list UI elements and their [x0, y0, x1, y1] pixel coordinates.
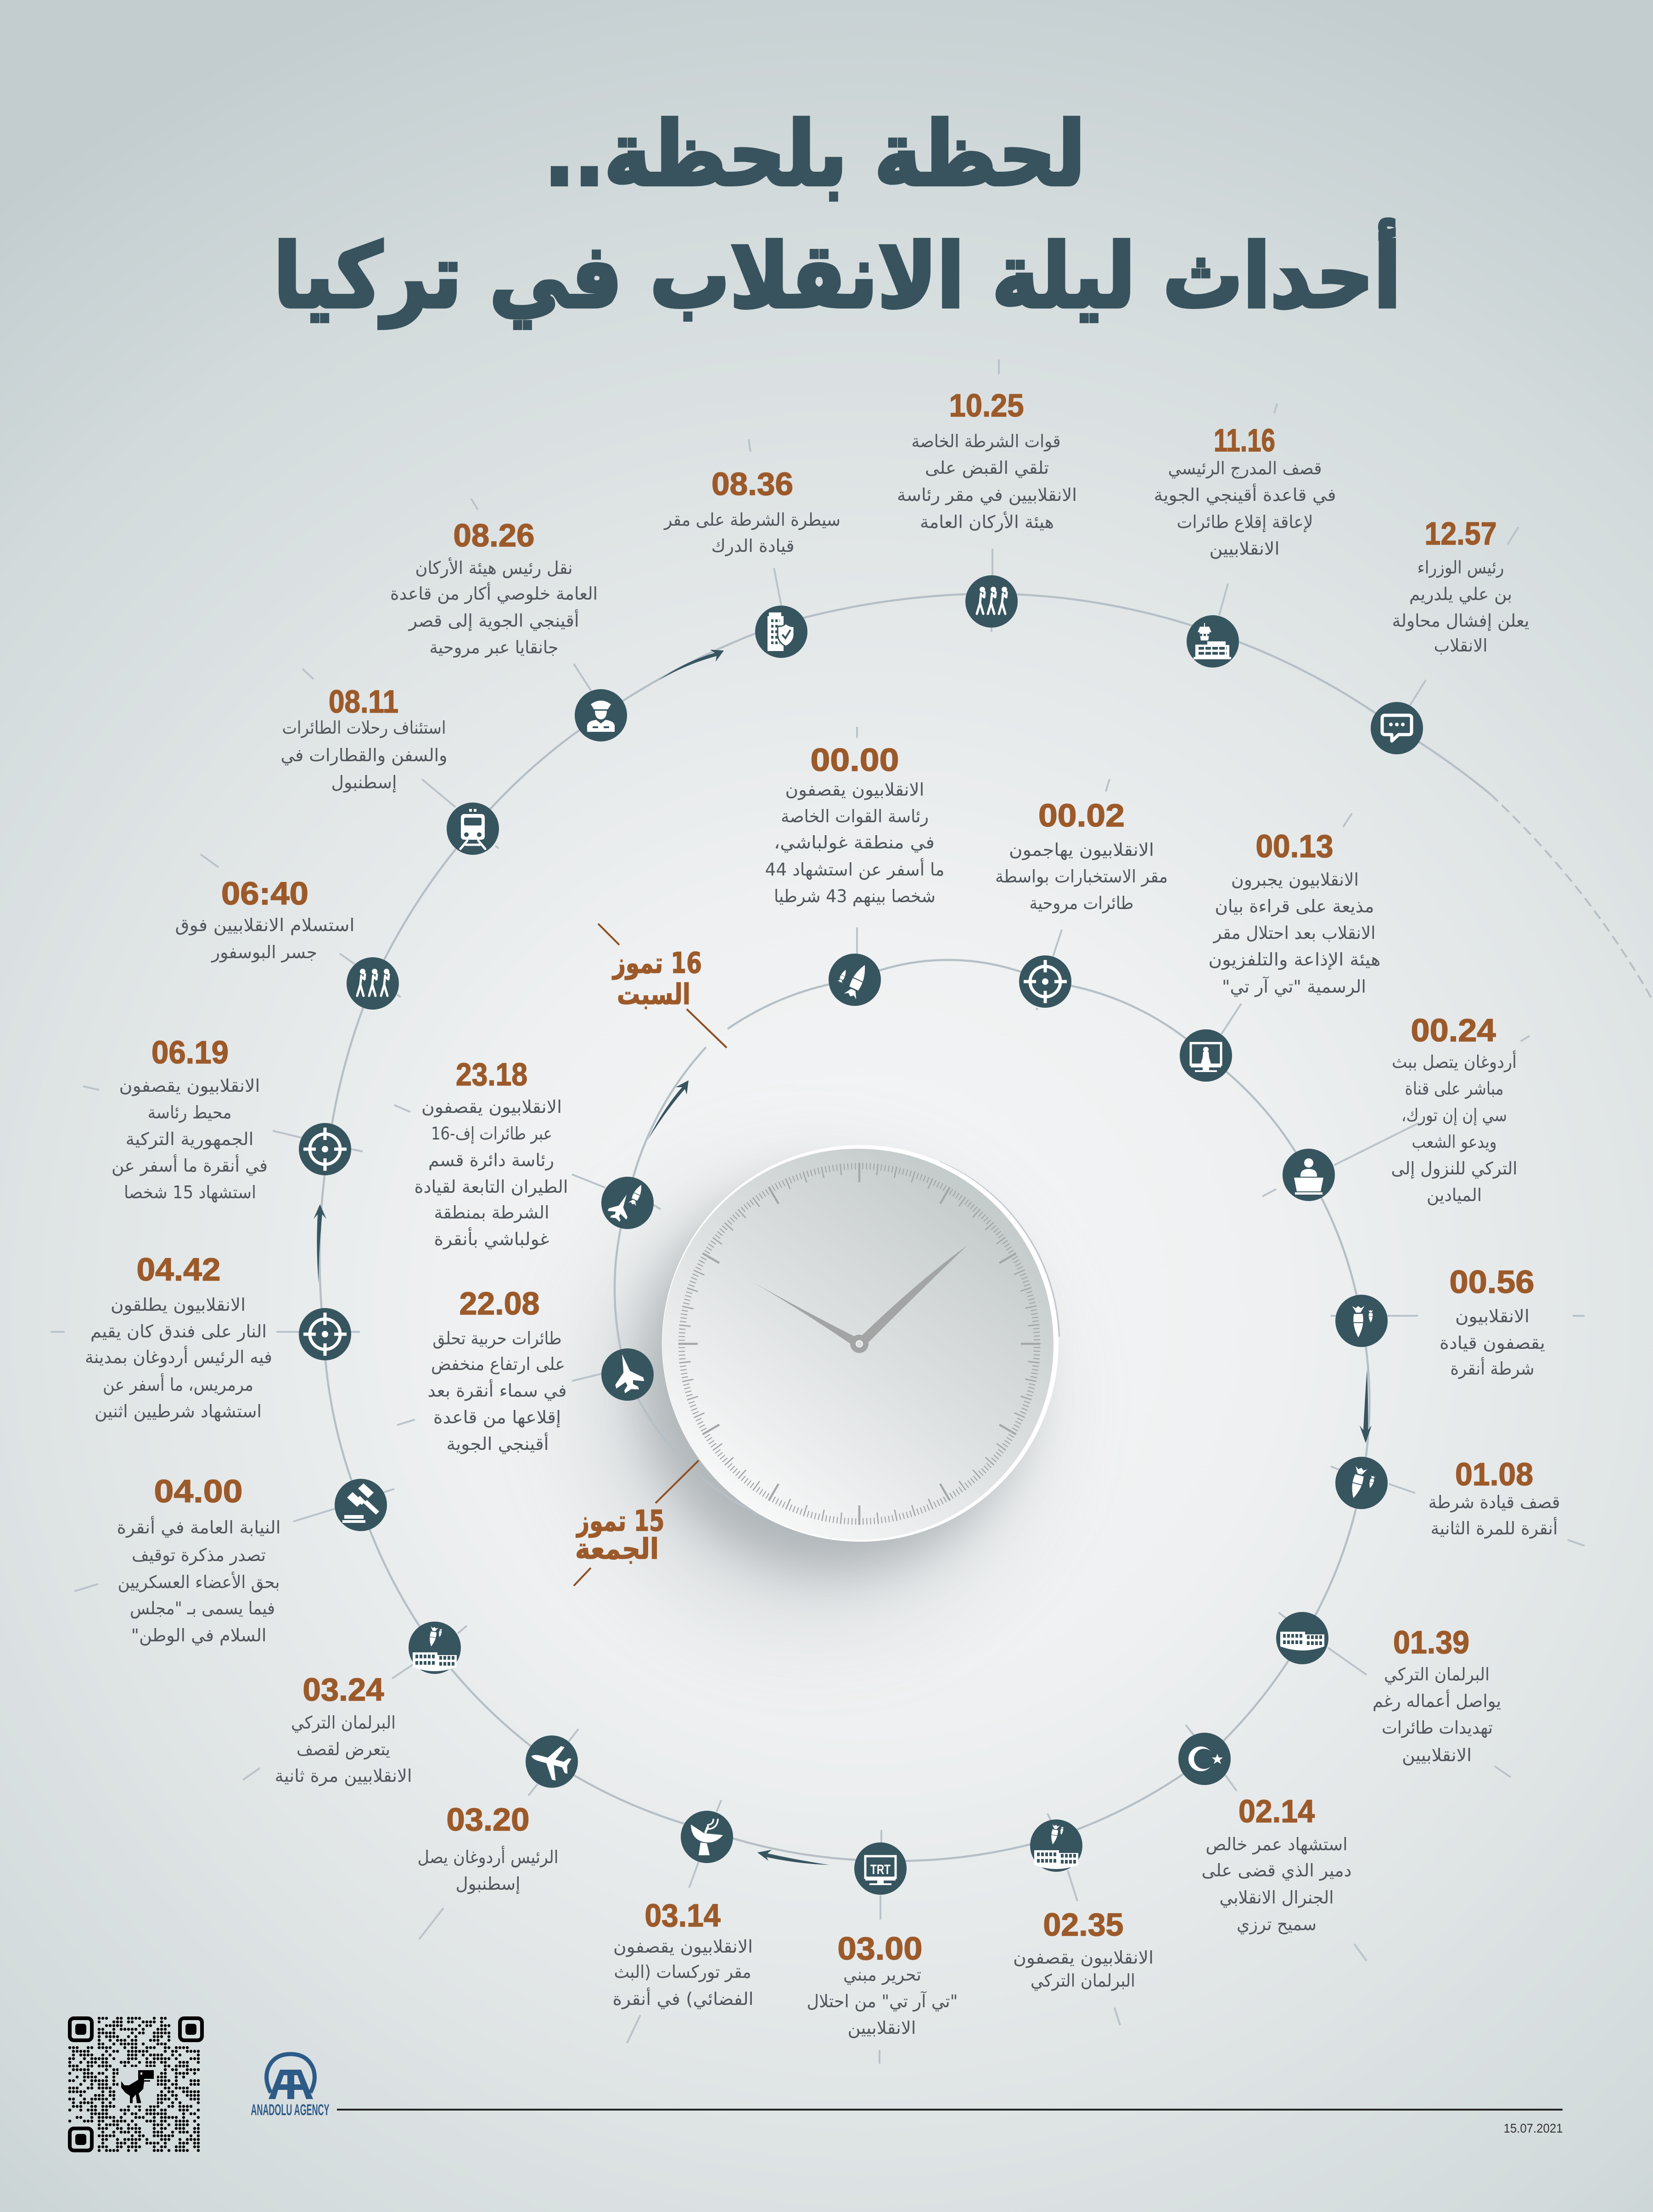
- description: [1013, 1948, 1154, 1991]
- date label: 15 Temmuz: 15 تموز: [576, 1504, 665, 1538]
- description: [897, 431, 1077, 532]
- time: 03.20: [446, 1802, 530, 1837]
- description: الانقلاب بعد احتلال مقر: [1213, 923, 1375, 943]
- description: يعلن إفشال محاولة: [1392, 611, 1530, 631]
- logo arch: [267, 2054, 314, 2093]
- Anadolu Agency logo: [251, 2054, 330, 2119]
- description: [765, 780, 945, 907]
- icon: satellite dish: [681, 1811, 733, 1863]
- description: الانقلابيون يجبرون: [1231, 870, 1359, 890]
- event 04.00: [117, 1473, 387, 1646]
- description: الانقلابيون يقصفون: [1013, 1948, 1154, 1968]
- event 08.26: [390, 517, 627, 741]
- icon: officer: [575, 689, 627, 741]
- clock face: [662, 1149, 1053, 1540]
- description: [1392, 557, 1530, 656]
- clock: [662, 1145, 1059, 1542]
- description: الانقلابيون يقصفون: [785, 780, 925, 800]
- description: "تي آر تي" من احتلال: [807, 1991, 958, 2012]
- date label: 16 Temmuz: السبت: [617, 977, 690, 1011]
- description: الانقلابيين: [1402, 1745, 1472, 1766]
- time: 03.24: [303, 1672, 384, 1707]
- description: يتعرض لقصف: [297, 1739, 390, 1760]
- icon: rockets: [829, 954, 881, 1006]
- event 03.20: [418, 1735, 578, 1894]
- event 03.00: [807, 1842, 958, 2038]
- time: 00.24: [1411, 1012, 1496, 1048]
- description: الانقلابيون يطلقون: [111, 1295, 246, 1315]
- description: والسفن والقطارات في: [281, 745, 447, 766]
- time: 04.00: [154, 1473, 242, 1509]
- description: الميادين: [1427, 1185, 1482, 1206]
- arrow: [659, 650, 724, 680]
- time: 04.42: [137, 1252, 220, 1287]
- description: [418, 1846, 558, 1894]
- description: السلام في الوطن": [131, 1625, 266, 1646]
- description: [414, 1097, 568, 1250]
- description: شرطة أنقرة: [1451, 1357, 1534, 1379]
- icon: TRT television: TRT: [870, 1862, 891, 1877]
- event 00.00: [765, 742, 945, 1006]
- description: تصدر مذكرة توقيف: [132, 1545, 266, 1566]
- description: [175, 915, 354, 963]
- description: إسطنبول: [455, 1874, 521, 1894]
- description: هيئة الإذاعة والتلفزيون: [1208, 949, 1381, 970]
- description: [1373, 1664, 1501, 1766]
- description: البرلمان التركي: [1384, 1664, 1490, 1685]
- description: ما أسفر عن استشهاد 44: [765, 858, 945, 880]
- clock shadow: [597, 1182, 1028, 1616]
- description: ويدعو الشعب: [1412, 1132, 1496, 1152]
- clock back arc: [940, 1162, 1059, 1336]
- description: إسطنبول: [331, 772, 397, 793]
- time: 08.36: [712, 466, 793, 502]
- description: الجنرال الانقلابي: [1219, 1887, 1334, 1908]
- description: رئيس الوزراء: [1418, 557, 1504, 578]
- time: 00.56: [1450, 1264, 1534, 1300]
- description: في سماء أنقرة بعد: [428, 1379, 566, 1401]
- time: 03.14: [644, 1898, 721, 1933]
- time: 01.08: [1455, 1456, 1533, 1492]
- description: الانقلابيون: [1455, 1306, 1530, 1327]
- description: الانقلابيين في مقر رئاسة: [897, 485, 1077, 505]
- event 00.56: [1335, 1264, 1545, 1379]
- description: عبر طائرات إف-16: [431, 1123, 552, 1144]
- time: 11.16: [1214, 422, 1275, 458]
- time: 06.19: [151, 1034, 229, 1070]
- description: في أنقرة ما أسفر عن: [112, 1154, 268, 1176]
- description: استسلام الانقلابيين فوق: [175, 915, 354, 936]
- description: [663, 510, 841, 556]
- event 11.16: [1154, 422, 1336, 668]
- description: طائرات مروحية: [1029, 893, 1134, 914]
- description: أقينجي الجوية إلى قصر: [408, 609, 579, 631]
- spiral timeline: [319, 594, 1653, 1861]
- event 06.19: [112, 1034, 351, 1203]
- description: سميح ترزي: [1237, 1914, 1317, 1935]
- footer rule: [337, 2109, 1563, 2111]
- time: 00.13: [1256, 828, 1333, 864]
- event 03.24: [275, 1622, 461, 1786]
- time: 03.00: [837, 1931, 923, 1966]
- icon: podium speaker: [1283, 1149, 1335, 1201]
- description: البرلمان التركي: [1031, 1971, 1135, 1991]
- icon: surrendering people: [347, 957, 399, 1010]
- icon: crosshair: [299, 1308, 351, 1360]
- event 10.25: [897, 387, 1077, 628]
- icon: bombed parliament: [409, 1622, 461, 1674]
- description: أنقرة للمرة الثانية: [1430, 1517, 1558, 1539]
- icon: bombed parliament: [1030, 1819, 1082, 1872]
- description: رئاسة دائرة قسم: [428, 1150, 554, 1171]
- icon: fighter jet: [601, 1348, 654, 1401]
- description: على ارتفاع منخفض: [431, 1354, 565, 1375]
- icon: bombs: [1335, 1295, 1388, 1347]
- time: 12.57: [1425, 516, 1496, 551]
- icon: jet and bomb: [601, 1177, 654, 1229]
- description: [117, 1516, 281, 1646]
- event 12.57: [1371, 516, 1530, 754]
- icon: bombs: [1335, 1457, 1388, 1509]
- description: [428, 1328, 566, 1454]
- description: يقصفون قيادة: [1440, 1333, 1545, 1353]
- description: [85, 1295, 272, 1422]
- description: جانقايا عبر مروحية: [430, 637, 558, 658]
- description: غولباشي بأنقرة: [434, 1227, 549, 1250]
- description: [112, 1076, 268, 1203]
- icon: gavel: [335, 1479, 387, 1531]
- description: قيادة الدرك: [712, 536, 794, 556]
- icon: TRT television: [854, 1842, 907, 1895]
- dinosaur: [121, 2070, 154, 2103]
- description: [1202, 1834, 1351, 1935]
- description: مباشر على قناة: [1405, 1078, 1504, 1099]
- description: في منطقة غولباشي،: [774, 832, 935, 853]
- arrow: [757, 1850, 829, 1865]
- clock pivot: [850, 1335, 869, 1353]
- time: 00.02: [1038, 797, 1125, 833]
- icon: parliament: [1276, 1612, 1328, 1664]
- icon: crescent and star: [1178, 1733, 1231, 1785]
- description: [1429, 1492, 1560, 1539]
- icon: detained people: [965, 575, 1018, 628]
- description: [1154, 458, 1336, 559]
- event 03.14: [612, 1811, 754, 2010]
- event 08.11: [281, 684, 499, 855]
- data modules: [70, 2018, 202, 2150]
- arrow: [1360, 1369, 1372, 1443]
- time: 10.25: [949, 387, 1024, 423]
- clock ticks: [678, 1163, 1040, 1525]
- description: لإعاقة إقلاع طائرات: [1177, 512, 1313, 533]
- description: الانقلاب: [1434, 635, 1487, 656]
- clock hands: [751, 1246, 967, 1348]
- description: مرمريس، ما أسفر عن: [103, 1373, 253, 1395]
- description: الانقلابيون يقصفون: [613, 1937, 753, 1957]
- event 00.02: [995, 797, 1168, 1008]
- event 02.35: [1013, 1819, 1154, 1991]
- description: سيطرة الشرطة على مقر: [663, 510, 841, 530]
- description: [612, 1937, 754, 2010]
- date: 15.07.2021: [1504, 2121, 1563, 2135]
- time: 08.26: [454, 517, 534, 553]
- description: سي إن إن تورك،: [1401, 1105, 1507, 1126]
- date label: 16 Temmuz: [598, 924, 727, 1048]
- description: شخصا بينهم 43 شرطيا: [774, 886, 936, 907]
- icon: airplane: [526, 1735, 578, 1788]
- description: الجمهورية التركية: [126, 1129, 253, 1150]
- description: [281, 718, 447, 793]
- description: الانقلابيون يقصفون: [421, 1097, 562, 1117]
- event 01.39: [1276, 1612, 1501, 1766]
- title: [274, 103, 1401, 328]
- description: [1208, 870, 1381, 997]
- logo wordmark: ANADOLU AGENCY: [251, 2101, 330, 2119]
- event 01.08: [1335, 1456, 1560, 1539]
- description: مقر الاستخبارات بواسطة: [995, 866, 1168, 887]
- description: [995, 840, 1168, 914]
- description: الانقلابيين: [847, 2018, 916, 2038]
- description: دمير الذي قضى على: [1202, 1860, 1351, 1881]
- time: 02.35: [1043, 1907, 1124, 1943]
- description: فيما يسمى بـ "مجلس: [130, 1598, 275, 1618]
- description: التركي للنزول إلى: [1391, 1158, 1518, 1179]
- finder patterns: [70, 2018, 202, 2150]
- time: 02.14: [1238, 1793, 1315, 1829]
- description: بن علي يلدريم: [1409, 584, 1512, 605]
- description: [390, 557, 598, 658]
- description: العامة خلوصي أكار من قاعدة: [390, 582, 598, 604]
- description: [1391, 1050, 1518, 1206]
- icon: speech bubble: [1371, 702, 1423, 754]
- description: طائرات حربية تحلق: [432, 1328, 562, 1349]
- icon: airport tower: [1187, 615, 1239, 668]
- description: مقر توركسات (البث: [614, 1962, 751, 1982]
- description: استئناف رحلات الطائرات: [282, 718, 446, 738]
- description: فيه الرئيس أردوغان بمدينة: [85, 1346, 272, 1368]
- description: في قاعدة أقينجي الجوية: [1154, 483, 1336, 505]
- description: الرئيس أردوغان يصل: [418, 1846, 558, 1868]
- description: تلقي القبض على: [925, 458, 1049, 478]
- description: أردوغان يتصل ببث: [1392, 1050, 1517, 1072]
- date label: 15 Temmuz: [574, 1460, 699, 1586]
- description: النيابة العامة في أنقرة: [117, 1516, 281, 1538]
- event 04.42: [85, 1252, 351, 1422]
- description: رئاسة القوات الخاصة: [781, 806, 929, 827]
- event 08.36: [663, 466, 841, 658]
- description: الشرطة بمنطقة: [434, 1202, 549, 1223]
- description: هيئة الأركان العامة: [920, 511, 1054, 532]
- description: استشهاد عمر خالص: [1205, 1834, 1348, 1855]
- logo AA letters: [269, 2070, 313, 2099]
- event 06:40: [175, 876, 399, 1010]
- event 02.14: [1178, 1733, 1351, 1935]
- event 23.18: [414, 1056, 654, 1250]
- description: [1440, 1306, 1545, 1379]
- description: [807, 1965, 958, 2038]
- clock rim: [662, 1145, 1059, 1542]
- arrow: [314, 1204, 326, 1283]
- description: البرلمان التركي: [291, 1712, 396, 1733]
- description: الانقلابيين: [1209, 539, 1280, 559]
- date label: 15 Temmuz: الجمعة: [575, 1532, 659, 1566]
- description: الانقلابيون يهاجمون: [1009, 840, 1154, 860]
- time: 00.00: [811, 742, 899, 778]
- description: قصف قيادة شرطة: [1429, 1492, 1560, 1513]
- description: استشهاد شرطيين اثنين: [95, 1401, 262, 1422]
- description: مذيعة على قراءة بيان: [1215, 896, 1374, 917]
- description: الطيران التابعة لقيادة: [414, 1177, 568, 1197]
- icon: crosshair: [1019, 955, 1071, 1008]
- description: النار على فندق كان يقيم: [90, 1321, 267, 1342]
- description: تهديدات طائرات: [1382, 1718, 1493, 1738]
- event 00.24: [1283, 1012, 1518, 1206]
- icon: train: [447, 803, 499, 855]
- description: قوات الشرطة الخاصة: [912, 431, 1060, 452]
- description: أقينجي الجوية: [446, 1432, 549, 1454]
- description: نقل رئيس هيئة الأركان: [415, 557, 573, 578]
- time: 01.39: [1393, 1624, 1469, 1660]
- description: الانقلابيين مرة ثانية: [275, 1766, 412, 1786]
- description: إقلاعها من قاعدة: [433, 1407, 561, 1428]
- icon: shielded building: [755, 606, 807, 658]
- QR code: [70, 2018, 202, 2150]
- icon: presenter on screen: [1180, 1029, 1232, 1082]
- description: الفضائي) في أنقرة: [612, 1987, 754, 2010]
- time: 08.11: [329, 684, 398, 719]
- time: 23.18: [456, 1056, 527, 1092]
- title: أحداث ليلة الانقلاب في تركيا: [274, 219, 1401, 328]
- description: جسر البوسفور: [211, 942, 317, 963]
- event 00.13: [1180, 828, 1381, 1082]
- description: الانقلابيون يقصفون: [119, 1076, 260, 1096]
- time: 22.08: [459, 1286, 540, 1321]
- description: تحرير مبني: [843, 1965, 921, 1985]
- description: يواصل أعماله رغم: [1373, 1690, 1501, 1712]
- event 22.08: [428, 1286, 654, 1454]
- description: قصف المدرج الرئيسي: [1168, 458, 1322, 479]
- description: الرسمية "تي آر تي": [1222, 976, 1366, 997]
- icon: crosshair: [299, 1123, 351, 1175]
- description: بحق الأعضاء العسكريين: [118, 1571, 280, 1593]
- time: 06:40: [221, 876, 308, 911]
- description: [275, 1712, 412, 1786]
- description: استشهاد 15 شخصا: [124, 1182, 256, 1203]
- description: محيط رئاسة: [148, 1102, 231, 1123]
- date label: 16 Temmuz: 16 تموز: [612, 946, 702, 980]
- title: لحظة بلحظة..: [544, 103, 1085, 206]
- arrow: [648, 1080, 689, 1140]
